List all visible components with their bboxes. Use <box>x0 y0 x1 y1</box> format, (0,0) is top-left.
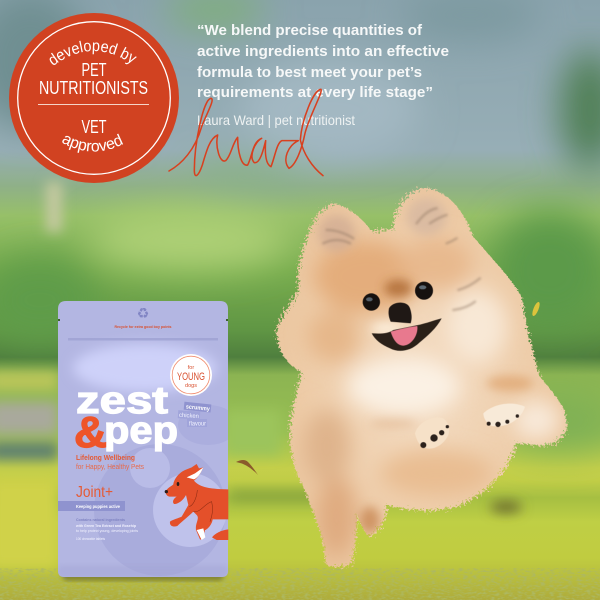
falling leaf <box>531 301 541 317</box>
illustrated red dog <box>165 464 228 540</box>
quote: formula to best meet your pet’s <box>197 64 422 81</box>
photo: running Pomeranian puppy <box>277 188 567 567</box>
bag body <box>58 301 238 577</box>
product bag: Zest & Pep Joint+ <box>58 301 238 581</box>
badge: developed by pet nutritionists, vet approved: NUTRITIONISTS <box>39 77 148 98</box>
small print: Contains natural ingredients <box>76 518 125 522</box>
logo: zest & pep: pep <box>104 410 178 452</box>
for young dogs sticker: YOUNG <box>177 371 205 383</box>
recycle text: Recycle for extra good boy points <box>114 325 172 329</box>
quote: requirements at every life stage” <box>197 84 433 101</box>
logo: zest & pep: & <box>74 408 107 457</box>
bag notches <box>58 319 228 321</box>
tagline: Lifelong Wellbeing <box>76 453 135 462</box>
left paw <box>415 417 449 449</box>
recycle icon: ♻ <box>137 306 149 322</box>
open mouth <box>372 318 442 351</box>
flavour tags: scrummy <box>186 404 211 413</box>
quote: “We blend precise quantities of <box>197 22 423 39</box>
logo: zest & pep <box>74 380 178 457</box>
bag shadow <box>62 568 224 581</box>
quote <box>197 22 449 101</box>
product bag: Zest & Pep Joint+: for Happy, Healthy Pets <box>76 462 144 471</box>
right paw <box>483 404 525 426</box>
small print: with Green Tea Extract and Rosehip <box>75 524 137 528</box>
signature <box>169 89 323 176</box>
eyes <box>363 293 380 311</box>
for young dogs sticker <box>170 354 212 396</box>
badge: developed by pet nutritionists, vet approved: VET <box>82 116 106 137</box>
flavour tags <box>178 402 211 428</box>
flavour tags: flavour <box>189 422 206 428</box>
tongue <box>391 326 417 346</box>
badge: developed by pet nutritionists, vet approved: approved <box>62 134 124 153</box>
benefit band <box>58 501 125 511</box>
leaf near bag <box>236 460 258 475</box>
flavour tags: chicken <box>179 413 199 420</box>
quote attribution: Laura Ward | pet nutritionist <box>197 112 355 128</box>
nose <box>389 303 412 323</box>
small print <box>75 518 138 541</box>
benefit band: Keeping puppies active <box>76 504 120 509</box>
for young dogs sticker: dogs <box>185 383 197 389</box>
ear fur streaks <box>323 208 480 310</box>
small print: 100 chewable tablets <box>76 537 105 541</box>
badge: developed by pet nutritionists, vet approved: developed by <box>50 40 137 65</box>
badge: developed by pet nutritionists, vet approved <box>9 13 220 183</box>
badge: developed by pet nutritionists, vet approved: PET <box>82 59 106 80</box>
small print: to help protect young, developing joints <box>76 529 138 533</box>
grass texture <box>0 568 600 600</box>
for young dogs sticker: for <box>188 365 194 371</box>
product name: Joint+ <box>76 484 113 501</box>
quote: active ingredients into an effective <box>197 43 449 60</box>
logo: zest & pep: zest <box>76 380 168 422</box>
